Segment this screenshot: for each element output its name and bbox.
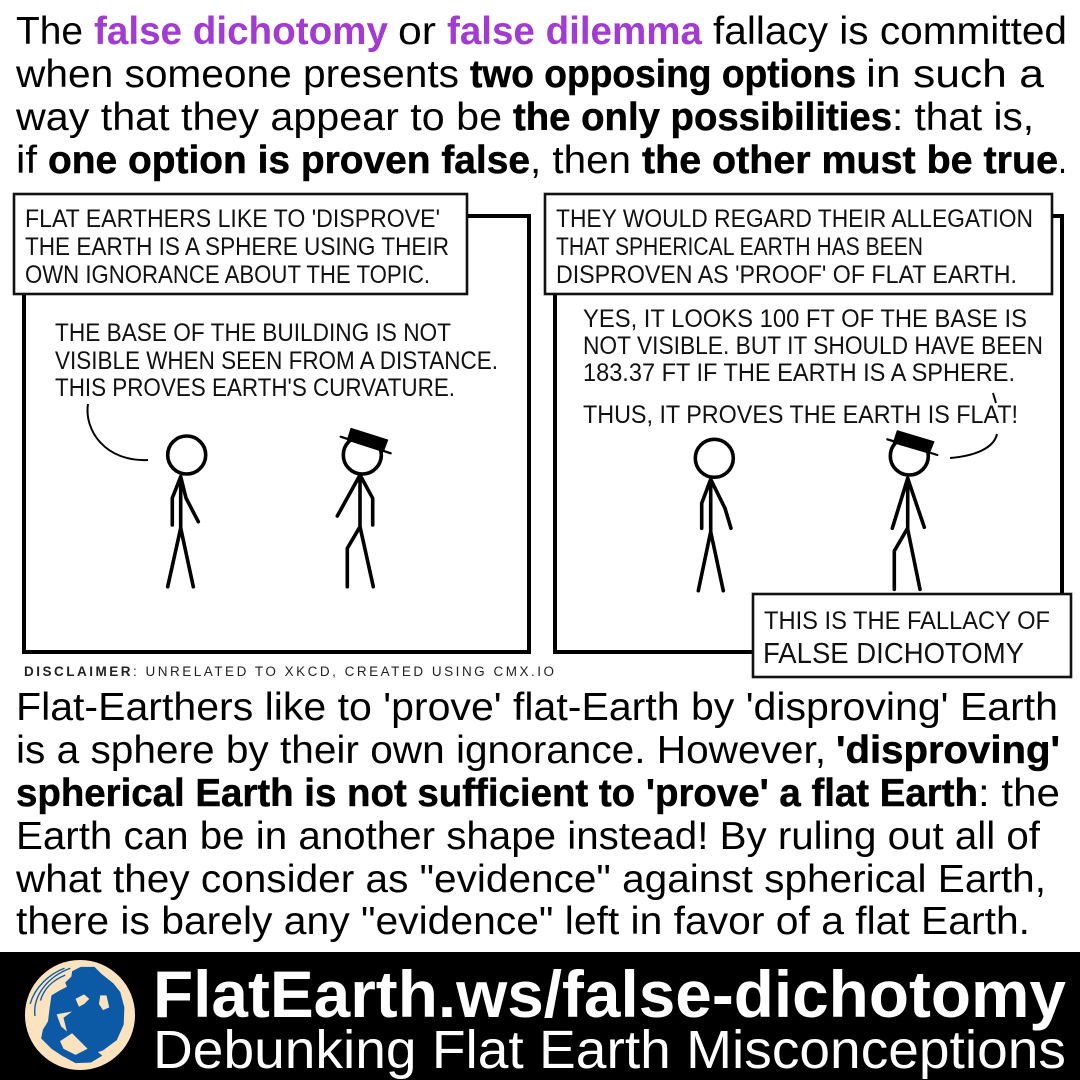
panel frame left: [24, 216, 529, 652]
panel: right comic: [545, 194, 1071, 677]
explanation text block: what they consider as "evidence" against spherical Earth,: [15, 858, 1046, 901]
stick figure: flat-earther with hat: [887, 431, 937, 589]
disclaimer: DISCLAIMER: UNRELATED TO XKCD, CREATED USING CMX.IO: [24, 664, 554, 679]
caption box left: [14, 194, 467, 294]
intro text block: one option is proven false: [48, 139, 530, 182]
stick figure: flat-earther with hat: [337, 428, 391, 587]
intro text block: The: [16, 10, 83, 53]
caption box: this is the fallacy: THIS IS THE FALLACY OF: [764, 607, 1050, 635]
footer band: [0, 952, 1080, 1080]
caption box right: DISPROVEN AS 'PROOF' OF FLAT EARTH.: [556, 261, 1017, 289]
intro text block: .: [1058, 139, 1067, 182]
explanation text block: Earth can be in another shape instead! By ruling out all of: [16, 815, 1040, 858]
intro text block: the other must be true: [642, 139, 1058, 182]
intro text block: two opposing options: [470, 53, 856, 96]
stick figure: round-earther: [695, 439, 733, 591]
explanation text block: Flat-Earthers like to 'prove' flat-Earth by 'disproving' Earth: [16, 686, 1058, 729]
explanation text block: spherical Earth is not sufficient to 'prove' a flat Earth: [16, 772, 978, 815]
speech: flat-earther: [583, 305, 1043, 458]
caption box right: THEY WOULD REGARD THEIR ALLEGATION: [556, 205, 1033, 233]
intro text block: fallacy is committed: [713, 10, 1067, 53]
caption box left: FLAT EARTHERS LIKE TO 'DISPROVE': [25, 205, 440, 233]
intro text block: , then: [530, 139, 631, 182]
intro text block: the only possibilities: [513, 96, 892, 139]
explanation text block: [15, 686, 1060, 943]
speech: round-earther: [55, 319, 498, 460]
caption box right: THAT SPHERICAL EARTH HAS BEEN: [556, 233, 923, 261]
explanation text block: is a sphere by their own ignorance. However,: [16, 729, 826, 772]
panel frame right: [555, 216, 1062, 652]
explanation text block: there is barely any "evidence" left in favor of a flat Earth.: [16, 900, 1030, 943]
speech: round-earther: THIS PROVES EARTH'S CURVATURE.: [55, 374, 455, 402]
speech: flat-earther: YES, IT LOOKS 100 FT OF THE BASE IS: [583, 305, 1027, 333]
speech: flat-earther: THUS, IT PROVES THE EARTH IS FLAT!: [583, 401, 1018, 429]
intro text block: when someone presents: [15, 53, 459, 96]
explanation text block: 'disproving': [836, 729, 1060, 772]
panel: left comic: [14, 194, 529, 652]
intro text block: or: [398, 10, 436, 53]
caption box right: [545, 194, 1052, 294]
intro text block: in such a: [866, 53, 1044, 96]
intro text block: false dilemma: [447, 10, 702, 53]
intro text block: [15, 10, 1067, 182]
intro text block: if: [16, 139, 37, 182]
icon: flat earth globe: [25, 960, 135, 1070]
caption box left: THE EARTH IS A SPHERE USING THEIR: [25, 233, 449, 261]
speech: round-earther: VISIBLE WHEN SEEN FROM A DISTANCE.: [55, 347, 498, 375]
intro text block: way that they appear to be: [15, 96, 502, 139]
footer url: FlatEarth.ws/false-dichotomy: [153, 957, 1066, 1031]
intro text block: false dichotomy: [94, 10, 388, 53]
caption box: this is the fallacy: FALSE DICHOTOMY: [763, 638, 1024, 670]
footer tagline: Debunking Flat Earth Misconceptions: [153, 1020, 1066, 1080]
stick figure: round-earther: [168, 436, 206, 587]
intro text block: : that is,: [892, 96, 1034, 139]
speech: round-earther: THE BASE OF THE BUILDING IS NOT: [55, 319, 451, 347]
caption box: this is the fallacy: [753, 594, 1071, 677]
caption box left: OWN IGNORANCE ABOUT THE TOPIC.: [25, 261, 430, 289]
explanation text block: : the: [978, 772, 1060, 815]
speech: flat-earther: NOT VISIBLE. BUT IT SHOULD HAVE BEEN: [583, 332, 1043, 360]
speech: flat-earther: 183.37 FT IF THE EARTH IS A SPHERE.: [583, 359, 1015, 387]
